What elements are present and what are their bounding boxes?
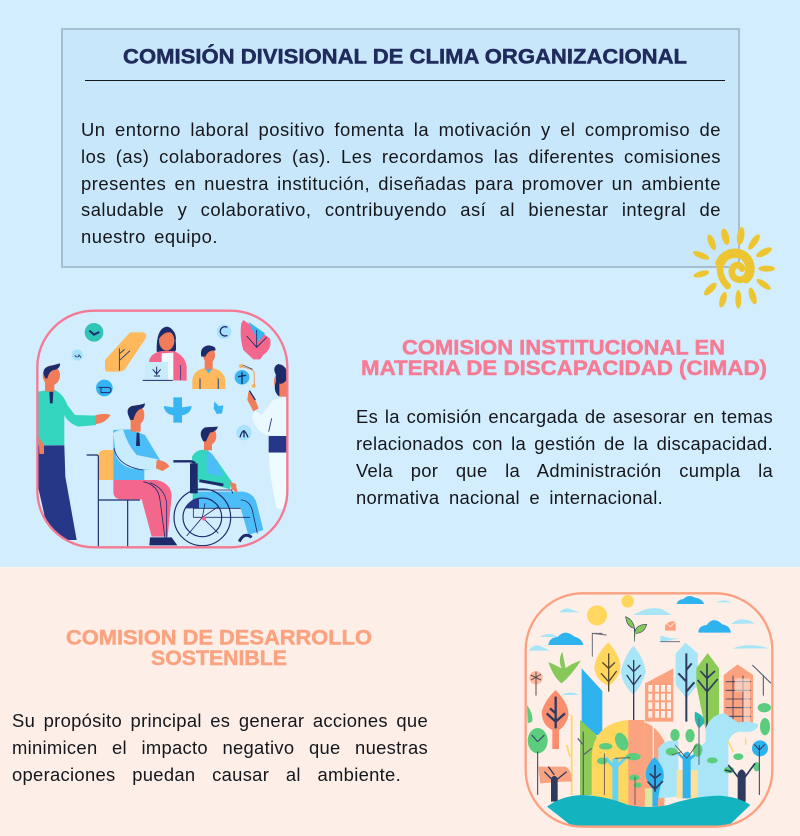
heading: desarrollo sostenible: COMISION DE DESARROLLO <box>66 626 372 650</box>
man in wheelchair, right <box>173 427 263 546</box>
man in green shirt, left <box>38 363 111 540</box>
text block: introduction: nuestro equipo. <box>81 226 218 247</box>
doctor, right <box>247 364 287 510</box>
heading: desarrollo sostenible <box>66 626 372 670</box>
heading: desarrollo sostenible: SOSTENIBLE <box>151 647 287 670</box>
text block: CIMAD <box>356 406 773 508</box>
text block: introduction: saludable y colaborativo, contribuyendo así al bienestar integral de <box>81 199 721 220</box>
text block: CIMAD: normativa nacional e internacional. <box>356 487 663 508</box>
buildings and trees <box>527 642 771 807</box>
text block: desarrollo sostenible: minimicen el impacto negativo que nuestras <box>12 737 428 758</box>
bottom section background <box>0 567 800 836</box>
text block: introduction: Un entorno laboral positivo fomenta la motivación y el compromiso de <box>81 119 721 140</box>
illustration: people with disabilities <box>36 310 288 548</box>
text block: CIMAD: Vela por que la Administración cumpla la <box>356 460 773 481</box>
panel: introduction <box>61 28 740 268</box>
text block: desarrollo sostenible: Su propósito principal es generar acciones que <box>12 710 428 731</box>
text block: introduction <box>81 119 721 247</box>
woman at laptop <box>143 327 187 381</box>
title: COMISIÓN DIVISIONAL DE CLIMA ORGANIZACIONAL <box>123 44 687 68</box>
text block: desarrollo sostenible <box>12 710 428 785</box>
heading: CIMAD: COMISION INSTITUCIONAL EN <box>402 336 725 360</box>
frame <box>37 311 287 547</box>
text block: desarrollo sostenible: operaciones puedan causar al ambiente. <box>12 764 401 785</box>
ground <box>547 795 750 826</box>
illustration: sustainable city <box>524 592 774 828</box>
text block: introduction: los (as) colaboradores (as). Les recordamos las diferentes comisiones <box>81 146 721 167</box>
frame <box>526 593 772 827</box>
text block: introduction: presentes en nuestra institución, diseñadas para promover un ambiente <box>81 173 721 194</box>
icon: sun <box>692 227 776 309</box>
heading: CIMAD <box>361 336 767 380</box>
man in yellow <box>192 345 225 389</box>
text block: CIMAD: Es la comisión encargada de asesorar en temas <box>356 406 773 427</box>
heading: CIMAD: MATERIA DE DISCAPACIDAD (CIMAD) <box>361 357 767 380</box>
sky <box>528 595 769 695</box>
text block: CIMAD: relacionados con la gestión de la discapacidad. <box>356 433 773 454</box>
floating icons <box>72 320 271 440</box>
man in wheelchair, centre <box>87 403 177 547</box>
